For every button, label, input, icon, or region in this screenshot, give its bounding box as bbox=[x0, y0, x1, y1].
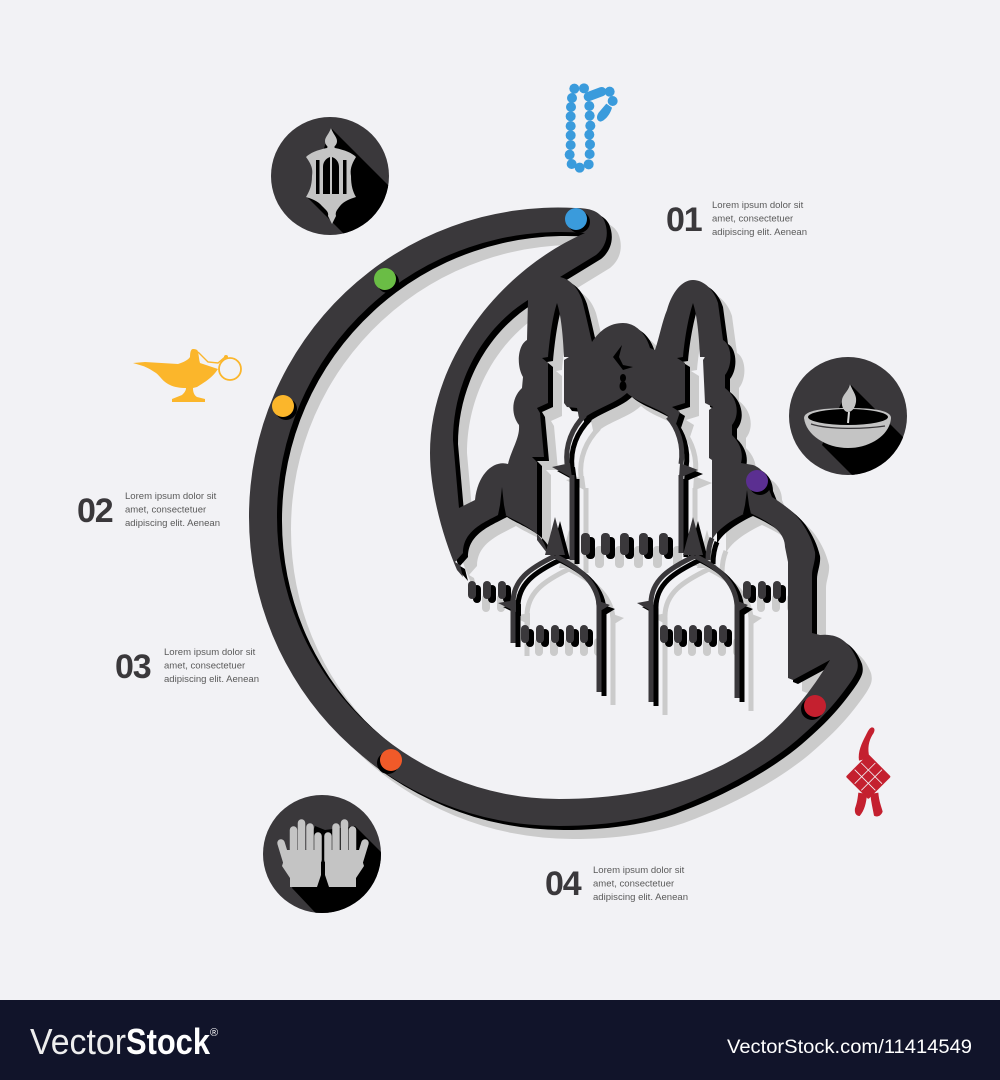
step 03: 03 bbox=[115, 648, 151, 686]
step 04 bbox=[545, 865, 688, 903]
step 02: adipiscing elit. Aenean bbox=[125, 518, 220, 529]
step 03: Lorem ipsum dolor sit bbox=[164, 647, 256, 658]
icon: praying hands in circle bbox=[263, 795, 381, 913]
footer bar: VectorStock.com/11414549 bbox=[727, 1037, 972, 1058]
footer bar: ® bbox=[210, 1027, 218, 1039]
step 02: Lorem ipsum dolor sit bbox=[125, 491, 217, 502]
step 04: 04 bbox=[545, 865, 582, 903]
step 01: 01 bbox=[666, 201, 702, 239]
step 04: amet, consectetuer bbox=[593, 878, 675, 890]
footer bar bbox=[0, 1000, 1000, 1080]
crescent and mosque ribbon bbox=[249, 208, 872, 839]
step 02: amet, consectetuer bbox=[125, 504, 207, 516]
icon: yellow magic lamp bbox=[133, 349, 241, 402]
step 01: amet, consectetuer bbox=[712, 214, 794, 224]
marker dots bbox=[272, 208, 826, 774]
footer bar: Vector bbox=[30, 1021, 126, 1062]
footer bar: Stock bbox=[126, 1021, 211, 1062]
step 01: Lorem ipsum dolor sit bbox=[712, 200, 804, 211]
icon: red ketupat bbox=[848, 727, 889, 816]
step 02: 02 bbox=[77, 492, 113, 530]
step 01 bbox=[666, 200, 807, 239]
step 03: amet, consectetuer bbox=[164, 660, 246, 672]
step 04: adipiscing elit. Aenean bbox=[593, 892, 688, 903]
step 03: adipiscing elit. Aenean bbox=[164, 674, 259, 685]
step 04: Lorem ipsum dolor sit bbox=[593, 865, 685, 876]
icon: lantern in circle bbox=[271, 117, 389, 235]
step 02 bbox=[77, 491, 220, 530]
icon: blue prayer beads bbox=[565, 83, 618, 173]
icon: oil lamp in circle bbox=[789, 357, 907, 475]
step 01: adipiscing elit. Aenean bbox=[712, 227, 807, 238]
step 03 bbox=[115, 647, 259, 686]
